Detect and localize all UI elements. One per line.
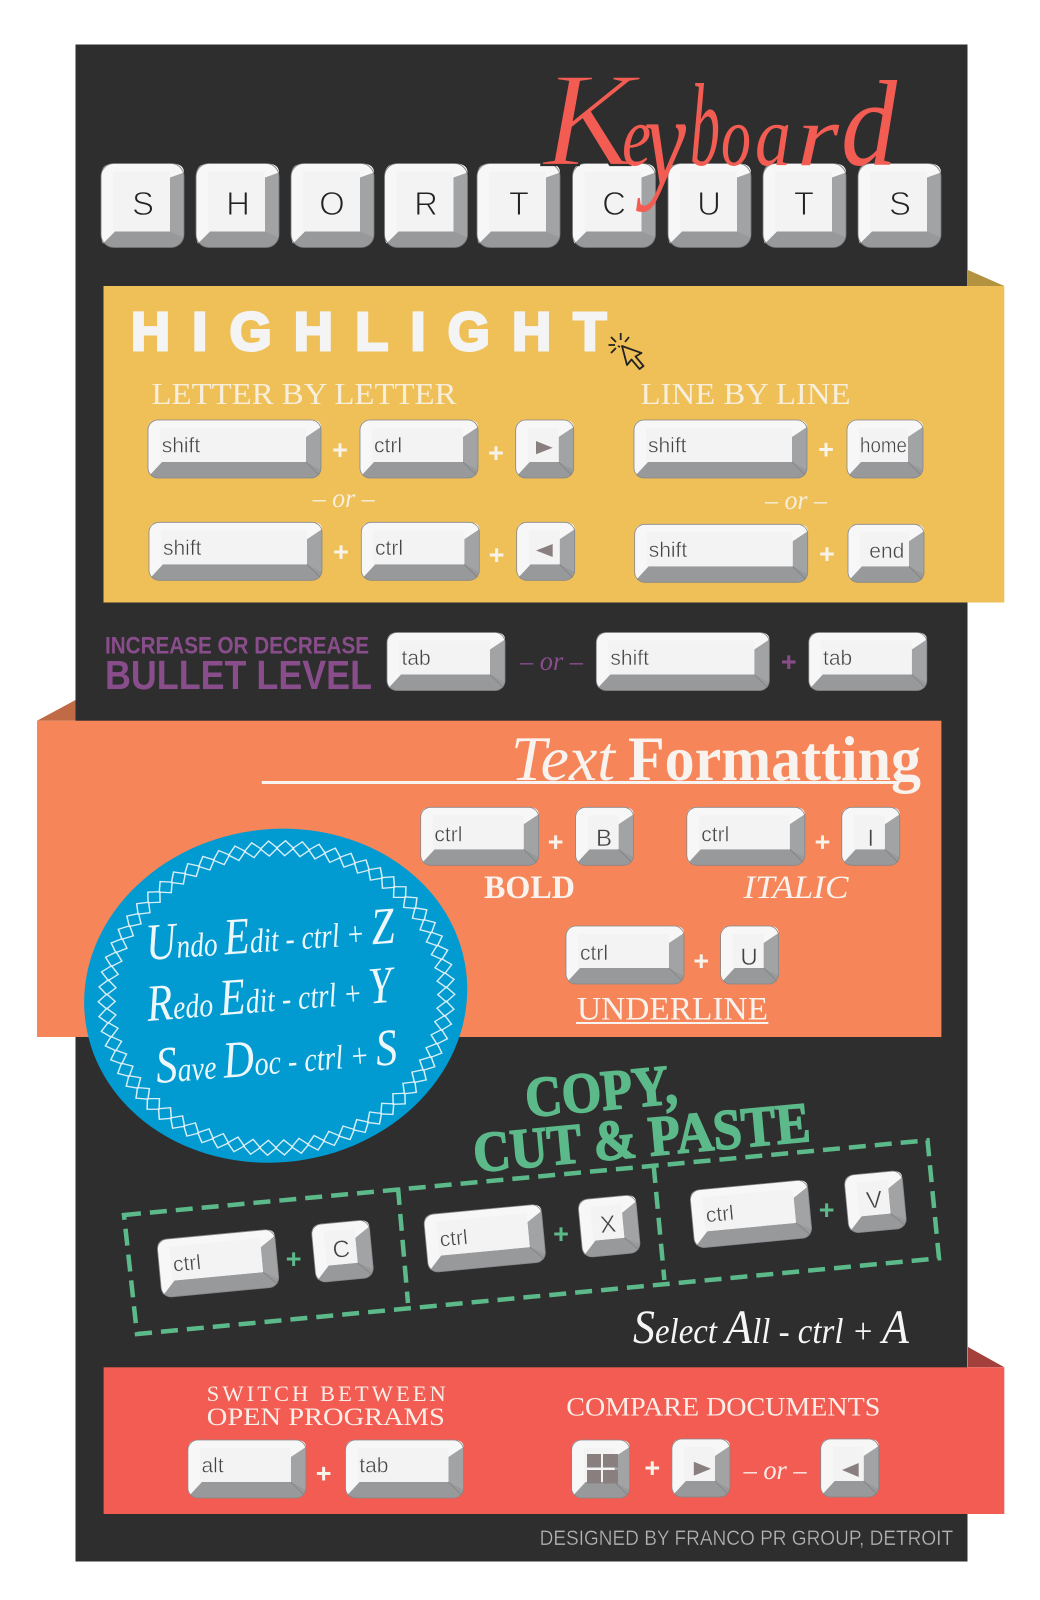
title: Keyboard script: e [622,88,651,184]
plus: + [489,540,505,570]
key T [477,164,560,248]
key left arrow [821,1439,879,1497]
key ctrl [566,926,684,984]
heading: cut and paste: CUT & PASTE [470,1091,813,1185]
key H [196,164,279,248]
plus: + [818,434,834,464]
plus: + [819,539,835,569]
section: bullet level [105,632,927,698]
key I [842,807,900,865]
heading: increase or decrease: INCREASE OR DECREASE [105,632,369,659]
key tab [346,1440,464,1498]
key shift: shift [610,647,649,670]
shortcut: shift ctrl left [149,522,575,580]
shortcut: italic [687,807,900,906]
key ctrl: ctrl [434,824,462,847]
key shift: shift [648,435,687,458]
text: redo edit: Redo Edit - ctrl + Y [144,957,398,1033]
shortcut: cut [423,1195,641,1273]
key tab: tab [823,647,852,670]
shortcut: paste [690,1170,907,1248]
panel background [104,1367,1004,1514]
key R [384,164,468,248]
key right arrow [672,1439,730,1497]
key shift: shift [163,537,202,560]
heading: HIGHLIGHT: HIGHLIGHT [131,302,629,362]
heading: open programs: OPEN PROGRAMS [207,1402,445,1431]
plus: + [781,647,797,677]
key S [858,164,941,248]
label: italic: ITALIC [742,870,850,906]
panel: text formatting [37,700,941,1037]
key ctrl [423,1204,546,1273]
plus: + [553,1219,569,1249]
or divider: – or – [519,646,583,676]
title keys: SHORTCUTS [101,164,941,248]
subheading: letter by letter: LETTER BY LETTER [152,376,457,411]
key U: U [697,185,721,222]
key ctrl [690,1180,812,1248]
or divider: – or – [312,483,375,513]
ribbon fold [968,1347,1004,1367]
key home [847,420,923,478]
plus: + [815,827,830,857]
title: Keyboard script: b [690,60,720,191]
title: Keyboard script: y [636,69,686,213]
key tab: tab [402,647,431,670]
key O [291,164,374,248]
label: bold: BOLD [484,870,575,906]
key X: X [599,1211,617,1239]
key V [844,1170,907,1233]
key T [763,164,846,248]
panel background [104,286,1004,602]
key shift: shift [649,539,687,562]
plus: + [316,1458,332,1488]
blue ellipse [62,804,489,1187]
key U: U [740,944,758,971]
or divider: – or – [743,1455,807,1485]
key ctrl [360,420,478,478]
key right arrow [516,420,574,478]
key end [848,524,924,582]
shortcut: shift ctrl right [148,420,574,478]
callout: undo redo save badge [37,774,516,1222]
key tab: tab [359,1455,389,1478]
key shift [148,420,321,478]
plus: + [693,946,709,976]
key C: C [331,1235,351,1264]
subheading: line by line: LINE BY LINE [640,376,850,411]
text: undo edit: Undo Edit - ctrl + Z [144,898,397,972]
key alt: alt [202,1455,224,1478]
key B: B [596,825,612,852]
key shift [634,420,807,478]
key end: end [869,540,904,563]
title: Keyboard script: d [841,57,898,192]
heading: Text Formatting: Text [511,724,617,794]
key ctrl [157,1229,280,1298]
heading: copy: COPY, [522,1053,680,1130]
title: Keyboard script: K [541,46,641,195]
key shift: shift [162,435,200,458]
key S: S [132,185,154,222]
ribbon fold [968,270,1004,286]
key C: C [602,185,626,222]
or divider: – or – [764,485,827,515]
key windows [572,1440,630,1498]
key ctrl: ctrl [172,1251,202,1277]
title: Keyboard script: r [797,88,840,184]
heading: bullet level: BULLET LEVEL [105,652,372,698]
key C [311,1220,374,1283]
plus: + [644,1453,660,1483]
key alt [188,1440,306,1498]
key T: T [794,185,814,222]
key ctrl: ctrl [375,537,403,560]
key ctrl: ctrl [705,1202,735,1227]
shortcut: shift end [635,524,924,582]
key S: S [889,185,911,222]
key ctrl [361,522,479,580]
key ctrl: ctrl [701,824,729,847]
shortcut: shift home [634,420,923,478]
key I: I [867,825,874,852]
key T: T [509,185,529,222]
section: copy cut paste [124,1053,939,1354]
key home: home [860,435,907,458]
shortcut: copy [157,1220,374,1298]
key R: R [414,185,438,222]
icon: mouse cursor click [608,333,644,369]
key shift [635,524,808,582]
key X [578,1195,641,1258]
plus: + [286,1244,302,1274]
plus: + [332,435,348,465]
key B [576,807,634,865]
key left arrow [517,522,575,580]
key shift [596,632,769,690]
key H: H [226,185,250,222]
panel: highlight [104,270,1004,602]
key ctrl [421,807,539,865]
label: underline: UNDERLINE [577,991,768,1027]
key ctrl: ctrl [374,435,402,458]
text: select all: Select All - ctrl + A [633,1301,910,1354]
key ctrl [687,807,805,865]
dashed cut box [124,1140,939,1334]
panel background [37,721,941,1037]
key S [101,164,184,248]
plus: + [333,537,349,567]
key ctrl: ctrl [580,942,608,965]
key tab [809,632,927,690]
plus: + [488,438,504,468]
key U [721,926,779,984]
diamond border [37,774,516,1222]
title: Keyboard script: a [755,88,791,184]
plus: + [819,1195,835,1225]
heading: Text Formatting: Formatting [628,724,921,794]
key V: V [865,1186,884,1215]
title: Keyboard script: o [721,88,751,184]
key ctrl: ctrl [439,1226,469,1252]
key O: O [319,185,345,222]
key tab [387,632,505,690]
credit line: DESIGNED BY FRANCO PR GROUP, DETROIT [540,1527,953,1550]
heading: Text Formatting [262,724,921,794]
heading: switch between: SWITCH BETWEEN [207,1381,446,1406]
heading: compare documents: COMPARE DOCUMENTS [566,1393,880,1422]
text: save doc: Save Doc - ctrl + S [153,1019,399,1095]
plus: + [548,827,563,857]
ribbon fold [37,700,76,721]
shortcut: bold [421,807,634,906]
key U [668,164,751,248]
key C [572,164,656,248]
panel: switch and compare [104,1347,1004,1514]
key shift [149,522,322,580]
shortcut: underline [566,926,779,1027]
